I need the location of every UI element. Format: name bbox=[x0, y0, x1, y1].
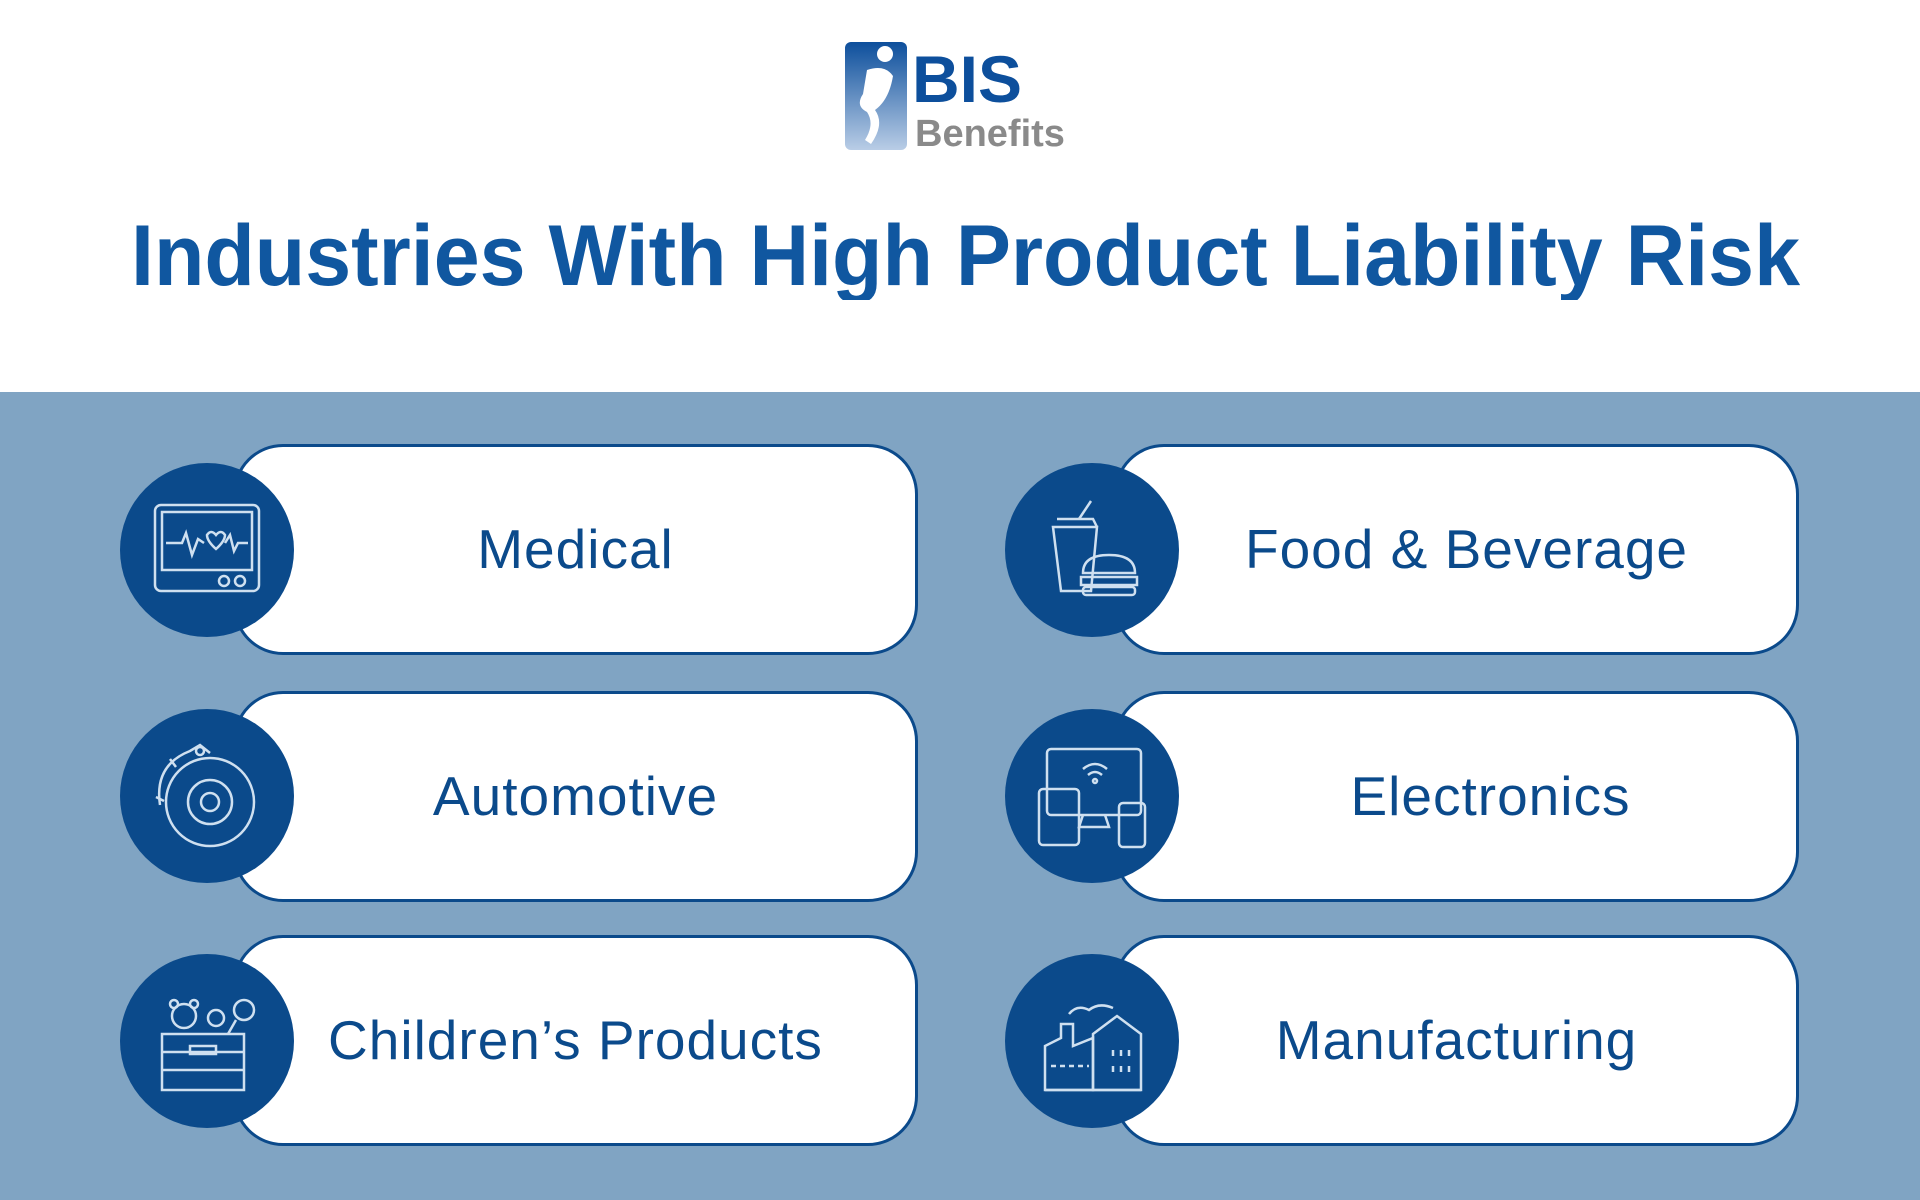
logo: BIS bbox=[912, 42, 1022, 116]
card: Manufacturing bbox=[1005, 935, 1799, 1146]
card: Food & Beverage bbox=[1005, 444, 1799, 655]
card: Food & Beverage: Food & Beverage bbox=[1245, 518, 1688, 580]
icon: heart monitor bbox=[120, 463, 294, 637]
logo bbox=[845, 42, 1065, 152]
icon: toy box bbox=[120, 954, 294, 1128]
icon: brake disc bbox=[120, 709, 294, 883]
card: Electronics bbox=[1005, 691, 1799, 902]
card: Automotive bbox=[120, 691, 918, 902]
card: Manufacturing: Manufacturing bbox=[1276, 1009, 1637, 1071]
card: Children's Products: Children’s Products bbox=[328, 1009, 823, 1071]
card: Medical: Medical bbox=[477, 518, 674, 580]
icon: factory bbox=[1005, 954, 1179, 1128]
card: Medical bbox=[120, 444, 918, 655]
card: Electronics: Electronics bbox=[1350, 765, 1630, 827]
background band bbox=[0, 392, 1920, 1200]
card: Automotive: Automotive bbox=[433, 765, 718, 827]
icon: devices bbox=[1005, 709, 1179, 883]
card: Children's Products bbox=[120, 935, 918, 1146]
icon: drink and burger bbox=[1005, 463, 1179, 637]
